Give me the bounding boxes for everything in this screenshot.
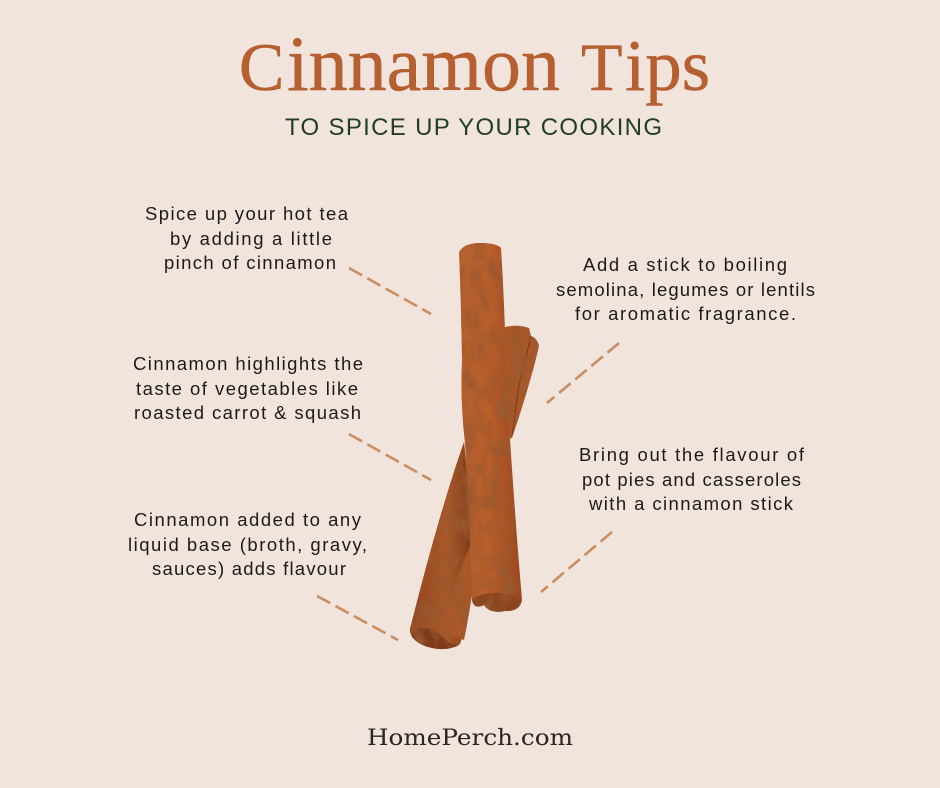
icon: cinnamon sticks: [410, 243, 539, 649]
tip: liquid base: liquid base (broth, gravy,: [128, 534, 367, 555]
tip: vegetables: [133, 353, 363, 423]
title: C: [239, 29, 284, 105]
tip: pot pies: pot pies and casseroles: [582, 469, 801, 490]
tip: pot pies: [579, 444, 805, 514]
tip: hot tea: [145, 203, 349, 273]
tip: hot tea: by adding a little: [170, 228, 332, 249]
dashed connectors: [317, 268, 619, 640]
tip: vegetables: roasted carrot & squash: [134, 402, 361, 423]
tip: boiling: for aromatic fragrance.: [575, 303, 796, 324]
tip: boiling: [556, 254, 815, 324]
tip: vegetables: Cinnamon highlights the: [133, 353, 363, 374]
title: ips: [625, 25, 710, 106]
tip: boiling: Add a stick to boiling: [583, 254, 787, 275]
title: innamon: [287, 20, 560, 107]
footer website: HomePerch.com: [367, 726, 573, 751]
subtitle: TO SPICE UP YOUR COOKING: [285, 114, 662, 141]
tip: liquid base: Cinnamon added to any: [134, 509, 362, 530]
tip: boiling: semolina, legumes or lentils: [556, 279, 815, 300]
tip: liquid base: sauces) adds flavour: [152, 558, 346, 579]
tip: hot tea: Spice up your hot tea: [145, 203, 349, 224]
tip: hot tea: pinch of cinnamon: [164, 252, 336, 273]
tip: vegetables: taste of vegetables like: [136, 378, 358, 399]
tip: liquid base: [128, 509, 367, 579]
tip: pot pies: with a cinnamon stick: [588, 493, 794, 514]
title: T: [581, 29, 623, 105]
tip: pot pies: Bring out the flavour of: [579, 444, 805, 465]
